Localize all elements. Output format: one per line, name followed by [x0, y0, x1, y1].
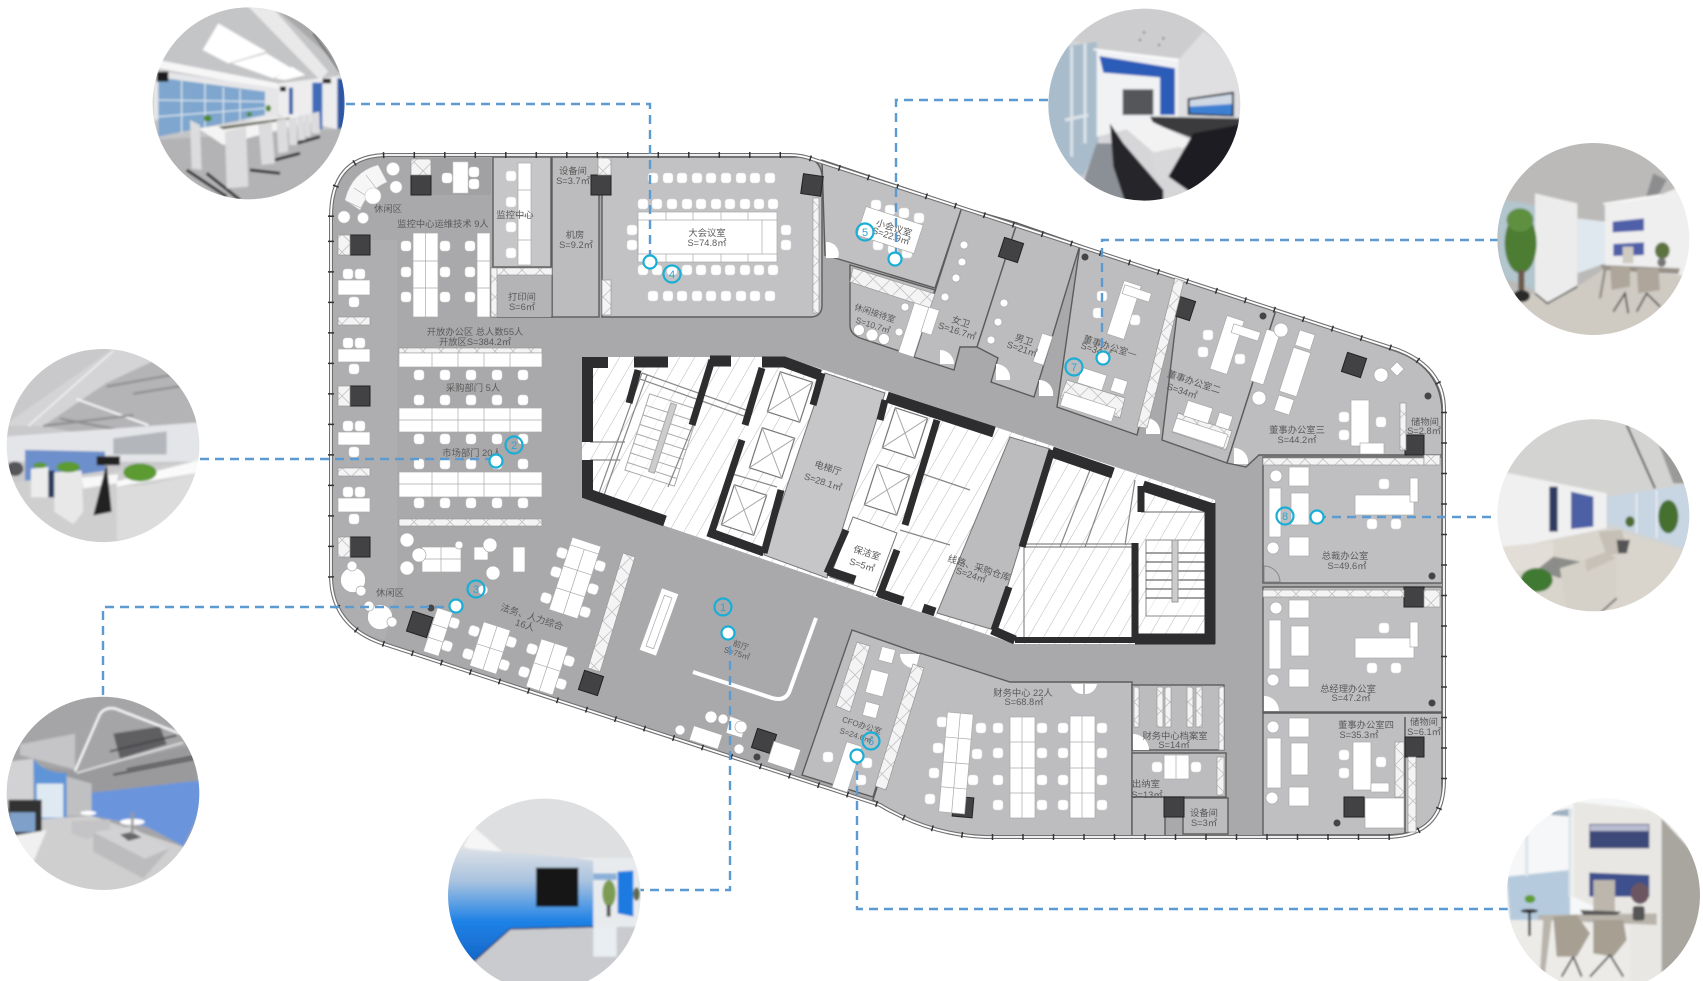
room labels	[374, 165, 1442, 828]
room labels: S=75㎡	[723, 645, 751, 662]
room labels: 大会议室	[688, 227, 726, 238]
lounge sofas	[422, 547, 461, 572]
room labels: 开放区S=384.2㎡	[439, 336, 512, 347]
room labels: 休闲区	[374, 203, 402, 214]
room fills	[331, 157, 1442, 836]
cleaning room	[830, 517, 897, 592]
room labels: 开放办公区 总人数55人	[427, 326, 523, 337]
outer curtain wall	[331, 155, 1444, 837]
room labels: 财务中心档案室	[1142, 730, 1208, 741]
floor slab and corridor	[331, 155, 1444, 837]
stairs west	[625, 394, 699, 486]
room labels: S=21㎡	[1006, 340, 1039, 359]
photo: president office	[1498, 419, 1690, 612]
room labels: S=5㎡	[848, 556, 877, 574]
room labels: S=68.8㎡	[1004, 697, 1044, 707]
room labels: 市场部门 20人	[442, 447, 502, 458]
chairs	[343, 171, 1401, 810]
room labels: 男卫	[1014, 333, 1034, 348]
leader: large meeting room	[346, 104, 650, 262]
numbered markers: 3	[473, 584, 479, 596]
room labels: 设备间	[559, 165, 587, 176]
leader: director office	[1102, 240, 1499, 358]
room labels: 储物间	[1410, 716, 1438, 727]
room labels: S=47.2㎡	[1331, 693, 1371, 703]
room labels: S=13㎡	[1131, 790, 1163, 800]
room labels: S=34㎡	[1166, 382, 1199, 401]
photo: lounge	[6, 696, 200, 890]
numbered markers: 4	[669, 269, 675, 281]
wardrobe strips	[338, 158, 1440, 832]
leader: lobby	[635, 633, 730, 890]
room labels: S=34㎡	[1080, 341, 1113, 360]
rooms	[331, 157, 1442, 836]
room labels: S=3㎡	[1191, 818, 1218, 828]
room labels: S=35.3㎡	[1339, 730, 1379, 740]
room labels: S=6㎡	[509, 302, 536, 312]
room labels: S=2.8㎡	[1407, 426, 1442, 436]
photo: director office	[1497, 143, 1690, 335]
core hatched area	[582, 357, 1215, 644]
room labels: 董事办公室四	[1338, 719, 1394, 730]
numbered markers: 6	[868, 736, 874, 748]
room labels: 法务、人力综合	[499, 601, 565, 632]
room labels: 线路、采购仓库	[946, 552, 1012, 583]
furniture	[338, 158, 1440, 832]
room labels: 采购部门 5人	[446, 382, 500, 393]
rotated desk clusters	[340, 206, 1418, 828]
room labels: 设备间	[1190, 807, 1218, 818]
room labels: 前厅	[732, 638, 750, 652]
photo: CFO office	[1503, 793, 1703, 981]
room divider	[1404, 717, 1406, 834]
room labels: 董事办公室三	[1269, 424, 1325, 435]
room labels: 总裁办公室	[1322, 550, 1368, 561]
room labels: 总经理办公室	[1320, 683, 1376, 694]
photo: lobby	[443, 793, 647, 981]
room labels: 16人	[514, 617, 536, 633]
room labels: 监控中心运维技术 9人	[397, 218, 489, 229]
open-office desks	[338, 163, 777, 512]
numbered markers: 5	[862, 227, 868, 239]
thin partition lines	[590, 373, 1215, 637]
numbered markers: 1	[720, 602, 726, 614]
numbered markers: 8	[1282, 511, 1288, 523]
room labels: 监控中心	[496, 209, 534, 220]
room labels: 储物间	[1411, 416, 1439, 427]
photo: boardroom	[150, 3, 350, 203]
numbered markers	[468, 224, 1294, 750]
room labels: S=16.7㎡	[937, 320, 978, 342]
floor plan	[331, 155, 1444, 837]
room labels: 小会议室	[875, 217, 913, 239]
potted plants	[428, 254, 1436, 826]
markers	[450, 224, 1324, 762]
leader: president office	[1317, 516, 1497, 518]
room labels: S=6.1㎡	[1407, 727, 1442, 737]
room labels: S=3.7㎡	[556, 176, 591, 186]
numbered markers: 2	[511, 440, 517, 452]
room labels: 休闲接待室	[853, 302, 897, 325]
elevators	[721, 372, 928, 535]
room labels: 财务中心 22人	[993, 687, 1053, 698]
photo: open office	[6, 349, 200, 542]
leader: small meeting room	[896, 100, 1048, 259]
door swings	[677, 242, 1280, 750]
stairs east	[1146, 540, 1206, 616]
room labels: S=49.6㎡	[1327, 561, 1367, 571]
room labels: S=44.2㎡	[1277, 435, 1317, 445]
room labels: 电梯厅	[813, 458, 843, 477]
room labels: CFO办公室	[841, 714, 883, 736]
reception curved counter	[693, 618, 816, 699]
room labels: 女卫	[951, 314, 972, 330]
elevator hall	[764, 373, 885, 578]
core walls	[582, 357, 1215, 644]
room labels: 董事办公室二	[1166, 368, 1222, 396]
marker dots	[450, 252, 1324, 762]
columns	[350, 174, 1424, 818]
numbered markers: 7	[1071, 362, 1077, 374]
room labels: 打印间	[508, 291, 536, 302]
dashed leader lines	[103, 100, 1512, 909]
room labels: S=22.9㎡	[871, 225, 912, 247]
room labels: S=10.7㎡	[854, 315, 892, 336]
central core	[582, 357, 1215, 644]
room labels: S=14㎡	[1158, 740, 1190, 750]
room labels: 出纳室	[1132, 778, 1160, 789]
room labels: S=24㎡	[955, 566, 988, 585]
room labels: 保洁室	[852, 543, 882, 562]
north-west lounge	[338, 162, 479, 224]
room labels: S=74.8㎡	[687, 238, 727, 248]
room labels: 休闲区	[376, 587, 404, 598]
room labels: S=28.1㎡	[803, 471, 844, 493]
warehouse hall	[937, 437, 1050, 630]
room labels: S=24.6㎡	[838, 726, 873, 745]
room labels: 董事办公室一	[1082, 333, 1138, 361]
leader: lounge	[103, 607, 456, 695]
leader: open office	[200, 458, 496, 460]
photo: small meeting room	[1047, 7, 1247, 207]
room labels: S=9.2㎡	[559, 240, 594, 250]
room labels: 机房	[566, 229, 584, 240]
leader: CFO office	[857, 756, 1512, 909]
